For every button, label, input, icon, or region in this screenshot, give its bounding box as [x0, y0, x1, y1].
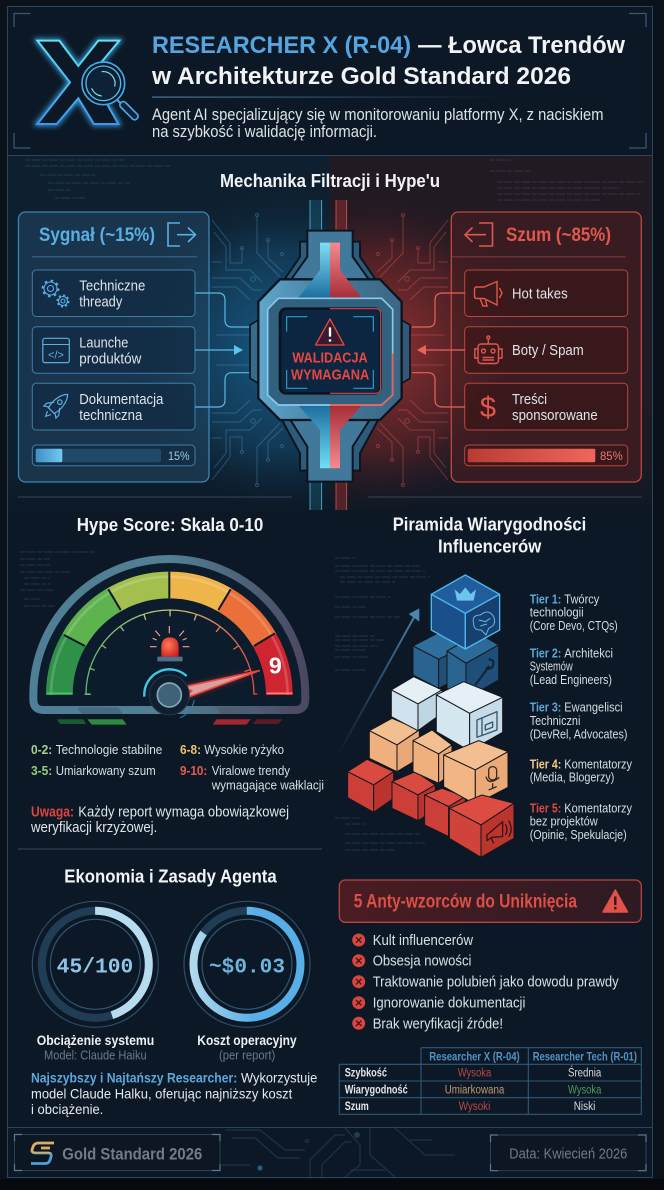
anti-pattern list: Brak weryfikacji źróde!: [373, 1015, 503, 1032]
donut captions: Obciążenie systemu: [37, 1032, 154, 1048]
tier 5 text: bez projektów: [530, 814, 598, 829]
subtitle: [152, 106, 604, 141]
tier 1 text: Tier 1:: [530, 591, 561, 606]
tier 4 text: Tier 4:: [530, 756, 561, 771]
comparison table: Researcher X (R-04): [429, 1052, 520, 1064]
economy note: model Claude Halku, oferując najniższy koszt: [31, 1085, 292, 1101]
gauge legend: [31, 742, 324, 792]
tier 3 cubes: [391, 677, 442, 731]
tier 5 cubes: [348, 759, 465, 837]
subtitle: Agent AI specjalizujący się w monitorowaniu platformy X, z naciskiem: [152, 106, 604, 124]
heading: Szum: Szum (~85%): [506, 225, 611, 246]
warning note: [30, 805, 289, 836]
tier 3 front cube: [436, 682, 503, 751]
gauge legend: Viralowe trendy: [212, 763, 290, 778]
item: Dokumentacja techniczna: techniczna: [79, 408, 143, 424]
gauge legend: 9-10:: [180, 763, 207, 778]
gauge hub: [144, 669, 194, 718]
tier 1 text: [530, 591, 618, 633]
tier 3 text: [530, 700, 627, 741]
comparison table: Wysoki: [459, 1101, 490, 1113]
beacon icon: [150, 626, 189, 661]
donut captions: Model: Claude Haiku: [44, 1048, 147, 1062]
tier 2 cubes: [413, 633, 499, 699]
economy note: Najszybszy i Najtańszy Researcher:: [31, 1069, 237, 1085]
tier 4 text: [530, 756, 632, 785]
pyramid legend: [530, 591, 632, 842]
anti-pattern list: Ignorowanie dokumentacji: [373, 994, 525, 1011]
validation chip: [250, 200, 410, 510]
item: Boty / Spam: [465, 327, 628, 373]
tier 2 text: [530, 645, 613, 687]
title: RESEARCHER X (R-04): [152, 32, 411, 59]
gauge chart: [33, 559, 305, 725]
warning note: Każdy report wymaga obowiązkowej: [78, 805, 289, 821]
tier 4 cubes: [369, 718, 452, 783]
comparison table: Umiarkowana: [445, 1084, 505, 1096]
progress bar: 85%: 85%: [600, 449, 623, 463]
anti-pattern banner: 5 Anty-wzorców do Uniknięcia: [354, 891, 577, 912]
donut captions: Koszt operacyjny: [197, 1032, 297, 1048]
validation chip: WYMAGANA: [291, 367, 369, 383]
icon: enter arrow: [465, 223, 492, 246]
heading: Hype Score: Hype Score: Skala 0-10: [77, 515, 263, 535]
gauge chart: 9: [269, 652, 282, 678]
donut captions: [37, 1032, 297, 1062]
item: Treści sponsorowane: Treści: [512, 392, 547, 408]
comparison table: Wiarygodność: [345, 1084, 408, 1096]
panel: Sygnał: [18, 212, 209, 482]
heading: Piramida: Piramida Wiarygodności: [393, 515, 586, 535]
economy note: i obciążenie.: [31, 1101, 103, 1117]
tier 2 text: (Lead Engineers): [530, 672, 612, 687]
arrows: noise connectors: [412, 293, 465, 407]
economy note: [31, 1069, 317, 1117]
tier 5 text: [530, 800, 632, 842]
tier 3 text: Techniczni: [530, 713, 580, 728]
item: Launche produktów: </>: [48, 349, 64, 361]
tier 1 cube: [431, 575, 500, 649]
needle: [182, 671, 259, 699]
gauge legend: Technologie stabilne: [56, 742, 162, 757]
donut: system load: 45/100: [57, 956, 133, 979]
section heading: Mechanika: Mechanika Filtracji i Hype'u: [220, 171, 440, 191]
item: Launche produktów: produktów: [79, 351, 142, 367]
heading: Piramida: [393, 515, 586, 557]
item: Hot takes: Hot takes: [512, 286, 568, 302]
anti-pattern banner: [339, 880, 641, 922]
item: Dokumentacja techniczna: [32, 383, 195, 430]
warning note: weryfikacji krzyżowej.: [30, 820, 157, 836]
tier 5 text: Tier 5:: [530, 800, 561, 815]
item: Hot takes: [465, 270, 628, 316]
tier 2 text: Systemów: [530, 659, 573, 674]
footer badge: date: Data: Kwiecień 2026: [509, 1146, 627, 1162]
item: Launche produktów: Launche: [79, 335, 128, 351]
anti-pattern list: Obsesja nowości: [373, 953, 471, 970]
tier 1 text: technologii: [530, 605, 584, 620]
header panel: [14, 14, 646, 148]
item: Launche produktów: [32, 327, 195, 373]
gauge legend: Umiarkowany szum: [56, 763, 156, 778]
gauge legend: wymagające wałklacji: [211, 777, 324, 792]
tier 4 text: (Media, Blogerzy): [530, 770, 614, 785]
gauge legend: 0-2:: [31, 742, 52, 757]
item: Boty / Spam: Boty / Spam: [512, 343, 584, 359]
subtitle: na szybkość i walidację informacji.: [152, 123, 377, 141]
economy note: Wykorzystuje: [241, 1069, 317, 1085]
tier 2 text: Tier 2:: [530, 645, 561, 660]
tier 4 text: Komentatorzy: [564, 756, 632, 771]
comparison table: Szum: [345, 1101, 369, 1113]
tier 3 text: (DevRel, Advocates): [530, 726, 627, 741]
item: Dokumentacja techniczna: Dokumentacja: [79, 392, 164, 408]
icon: neon X with magnifying glass: [37, 41, 139, 124]
progress bar: 15%: 15%: [168, 449, 190, 463]
title: — Łowca Trendów: [418, 32, 625, 59]
comparison table: Szybkość: [345, 1068, 387, 1080]
heading: Piramida: Influencerów: [438, 537, 542, 557]
tier 3 text: Tier 3:: [530, 700, 561, 715]
item: Techniczne thready: Techniczne: [79, 279, 145, 295]
tier 5 text: Komentatorzy: [564, 800, 632, 815]
panel: Szum: [451, 212, 641, 482]
anti-pattern list: [352, 932, 619, 1032]
validation chip: WALIDACJA: [292, 351, 368, 367]
icon: warning triangle: [603, 890, 628, 912]
gauge legend: 6-8:: [180, 742, 201, 757]
heading: Ekonomia: Ekonomia i Zasady Agenta: [64, 866, 278, 886]
comparison table: Wysoka: [568, 1084, 602, 1096]
tier 5 text: (Opinie, Spekulacje): [530, 827, 627, 842]
tier 1 text: (Core Devo, CTQs): [530, 618, 618, 633]
comparison table: Niski: [574, 1101, 595, 1113]
donut: operating cost: ~$0.03: [209, 956, 285, 979]
comparison table: Wysoka: [458, 1068, 492, 1080]
tier 4 front cube: [444, 741, 508, 804]
title: w Architekturze Gold Standard 2026: [151, 63, 571, 90]
anti-pattern list: Kult influencerów: [373, 932, 473, 949]
footer badge: Gold Standard: Gold Standard 2026: [62, 1144, 202, 1163]
arrows: signal connectors: [195, 293, 250, 407]
icon: gold standard logo: [31, 1143, 54, 1164]
comparison table: Researcher Tech (R-01): [533, 1052, 637, 1064]
progress bar: 85%: [465, 445, 628, 466]
anti-pattern list: Traktowanie polubień jako dowodu prawdy: [373, 974, 619, 991]
heading: Sygnał: Sygnał (~15%): [39, 225, 155, 246]
item: Treści sponsorowane: [465, 383, 628, 430]
footer badge: date: [490, 1135, 646, 1171]
progress bar: 15%: [32, 445, 195, 466]
donut: operating cost: [184, 901, 310, 1027]
title: [151, 32, 625, 90]
gauge legend: Wysokie ryżyko: [204, 742, 284, 757]
tier 1 text: Twórcy: [564, 591, 600, 606]
donut: system load: [32, 901, 158, 1027]
tier 2 text: Architekci: [564, 645, 613, 660]
comparison table: Średnia: [568, 1067, 602, 1080]
warning note: Uwaga:: [31, 805, 74, 821]
tier 3 text: Ewangelisci: [564, 700, 623, 715]
gauge legend: 3-5:: [31, 763, 52, 778]
item: Treści sponsorowane: $: [480, 392, 496, 424]
trend arrow: [339, 608, 419, 753]
pyramid chart: [339, 575, 514, 857]
comparison table: [339, 1048, 641, 1114]
item: Treści sponsorowane: sponsorowane: [512, 408, 598, 424]
donut captions: (per report): [219, 1048, 275, 1062]
item: Techniczne thready: thready: [79, 295, 123, 311]
icon: exit arrow: [168, 223, 196, 246]
item: Techniczne thready: [32, 270, 195, 316]
footer badge: Gold Standard: [14, 1134, 220, 1170]
tier 5 front cube: [449, 795, 514, 857]
